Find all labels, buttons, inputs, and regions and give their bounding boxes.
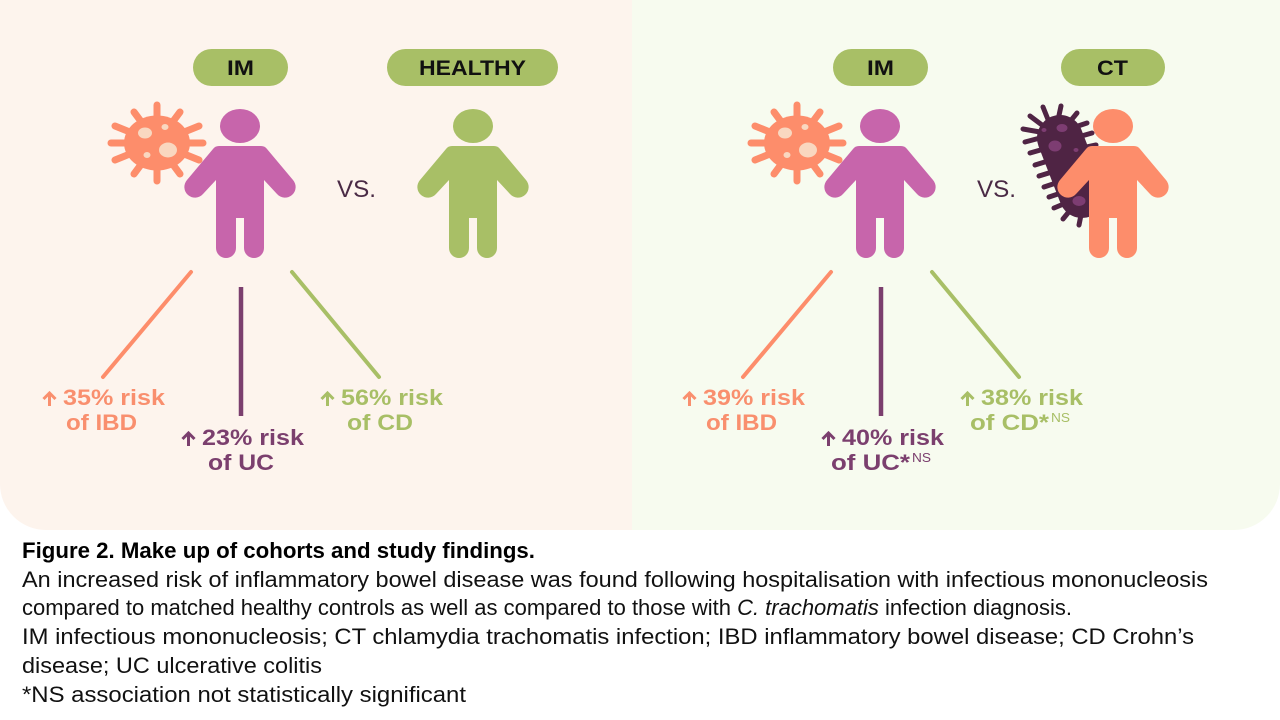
icon: IM person — [184, 109, 296, 258]
result: 40% UC — [822, 425, 945, 475]
panel: IM vs healthy — [0, 0, 632, 530]
result: 39% IBD: 39% risk — [703, 385, 806, 410]
line: UC branch — [239, 287, 243, 416]
caption line 5: *NS association not statistically significant — [22, 682, 466, 707]
caption line 4: disease; UC ulcerative colitis — [22, 653, 322, 678]
result: 40% UC: of UC* — [831, 450, 911, 475]
result: 38% CD — [962, 385, 1084, 435]
pill: CT — [1061, 49, 1165, 86]
result: 38% CD: NS — [1051, 410, 1070, 425]
caption line 3: IM infectious mononucleosis; CT chlamydia trachomatis infection; IBD inflammatory bowel disease; CD Crohn’s — [22, 624, 1194, 649]
line: CD branch — [292, 272, 379, 377]
result: 40% UC: NS — [912, 450, 931, 465]
result: 56% CD — [322, 385, 444, 435]
result: 38% CD: of CD* — [970, 410, 1050, 435]
result: 35% IBD — [44, 385, 166, 435]
text: vs: VS. — [977, 176, 1016, 203]
icon: virus — [751, 105, 843, 181]
icon: healthy person — [417, 109, 529, 258]
icon: IM person — [824, 109, 936, 258]
result: 23% UC: 23% risk — [202, 425, 305, 450]
pill: CT: CT — [1097, 57, 1128, 80]
result: 38% CD: 38% risk — [981, 385, 1084, 410]
pill: IM — [193, 49, 288, 86]
panel: IM vs CT — [632, 0, 1280, 530]
result: 35% IBD: 35% risk — [63, 385, 166, 410]
pill: HEALTHY — [387, 49, 558, 86]
result: 35% IBD: of IBD — [66, 410, 137, 435]
line: UC branch — [879, 287, 883, 416]
icon: bacterium — [1023, 106, 1096, 225]
icon: CT person — [1057, 109, 1169, 258]
line: IBD branch — [103, 272, 191, 377]
line: IBD branch — [743, 272, 831, 377]
result: 56% CD: 56% risk — [341, 385, 444, 410]
pill: IM: IM — [867, 57, 894, 80]
pill: IM: IM — [227, 57, 254, 80]
caption line 2: compared to matched healthy controls as well as compared to those with C. trachomatis infection diagnosis. — [22, 595, 1072, 620]
result: 40% UC: 40% risk — [842, 425, 945, 450]
icon: virus — [111, 105, 203, 181]
caption title: Figure 2. Make up of cohorts and study findings. — [22, 538, 535, 563]
caption — [22, 538, 1208, 707]
pill: HEALTHY: HEALTHY — [419, 57, 526, 80]
result: 39% IBD: of IBD — [706, 410, 777, 435]
result: 23% UC — [182, 425, 305, 475]
text: vs: VS. — [337, 176, 376, 203]
pill: IM — [833, 49, 928, 86]
result: 23% UC: of UC — [208, 450, 274, 475]
caption line 1: An increased risk of inflammatory bowel disease was found following hospitalisation with infectious mononucleosis — [22, 567, 1208, 592]
line: CD branch — [932, 272, 1019, 377]
result: 39% IBD — [684, 385, 806, 435]
result: 56% CD: of CD — [347, 410, 413, 435]
